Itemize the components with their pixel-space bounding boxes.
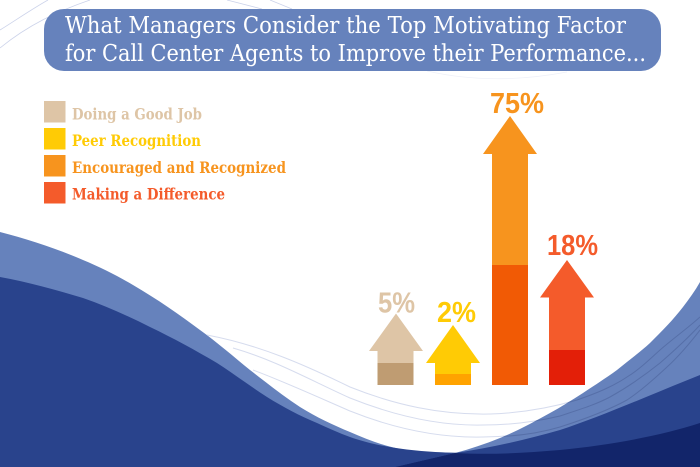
background waves bbox=[0, 232, 700, 467]
wave contour lines bbox=[207, 335, 577, 437]
legend item: Making a Difference bbox=[44, 182, 225, 204]
light blue left wave bbox=[0, 232, 460, 467]
legend item: Peer Recognition bbox=[44, 128, 201, 150]
arrow: 5% Doing a Good Job bbox=[369, 288, 423, 385]
legend item: Doing a Good Job: Doing a Good Job bbox=[72, 104, 202, 124]
right wave contour lines bbox=[483, 317, 700, 437]
arrow: 2% Peer Recognition bbox=[426, 297, 480, 385]
legend bbox=[44, 101, 286, 204]
arrow: 75% Encouraged and Recognized: 75% bbox=[490, 88, 544, 120]
title text: for Call Center Agents to Improve their Performance... bbox=[65, 41, 646, 67]
dark blue left wave bbox=[0, 277, 460, 467]
arrow: 18% Making a Difference: 18% bbox=[547, 230, 598, 262]
light blue right wave bbox=[395, 282, 700, 467]
title banner bbox=[44, 9, 661, 71]
navy base wave bbox=[395, 423, 700, 467]
legend item: Encouraged and Recognized bbox=[44, 155, 286, 177]
arrow: 5% Doing a Good Job: 5% bbox=[378, 288, 415, 320]
title text: What Managers Consider the Top Motivating Factor bbox=[65, 13, 626, 39]
legend item: Peer Recognition: Peer Recognition bbox=[72, 131, 201, 150]
arrow: 18% Making a Difference bbox=[540, 230, 598, 385]
dark blue right wave bbox=[395, 375, 700, 467]
legend item: Making a Difference: Making a Difference bbox=[72, 184, 225, 204]
legend item: Doing a Good Job bbox=[44, 101, 202, 124]
arrow: 75% Encouraged and Recognized bbox=[483, 88, 544, 385]
arrow: 2% Peer Recognition: 2% bbox=[437, 297, 476, 329]
title text bbox=[65, 13, 646, 67]
legend item: Encouraged and Recognized: Encouraged and Recognized bbox=[72, 158, 286, 177]
